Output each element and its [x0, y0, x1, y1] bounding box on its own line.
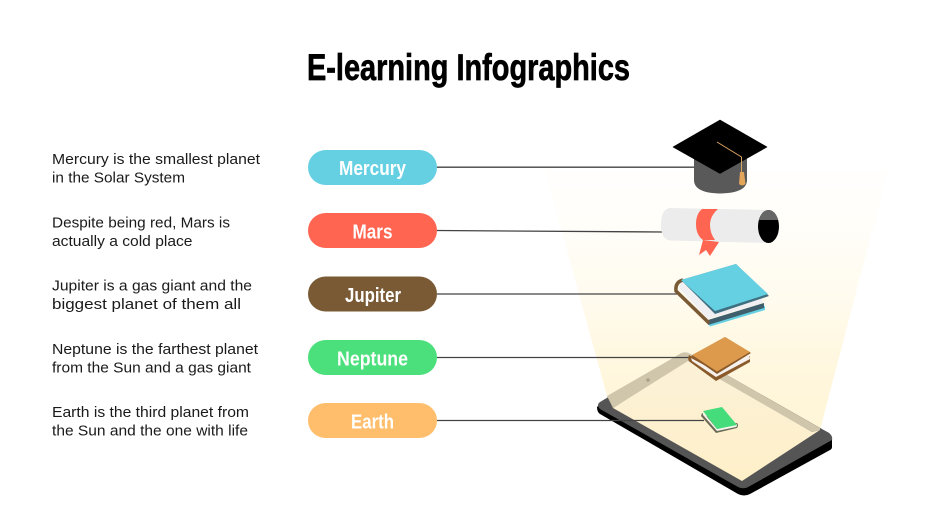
icon: orange book	[688, 337, 751, 381]
text block: Earth: the Sun and the one with life	[52, 422, 248, 440]
text block: Jupiter: biggest planet of them all	[52, 296, 241, 313]
screen	[613, 360, 820, 481]
icon: diploma scroll	[661, 208, 779, 256]
pill: Jupiter	[308, 276, 437, 312]
bezel under light	[607, 352, 820, 432]
text block: Mercury: in the Solar System	[52, 170, 185, 186]
connector lines	[437, 167, 704, 420]
text block: Earth: Earth is the third planet from	[52, 404, 249, 421]
pill: Earth: Earth	[351, 410, 394, 434]
text block: Mars	[52, 214, 230, 250]
camera	[646, 378, 650, 382]
text block: Neptune: from the Sun and a gas giant	[52, 360, 252, 376]
text block: Mercury	[52, 151, 261, 186]
icon: blue book	[676, 264, 769, 326]
text block: Mars: actually a cold place	[52, 233, 192, 250]
text block: Neptune: Neptune is the farthest planet	[52, 341, 259, 358]
pill: Neptune: Neptune	[337, 348, 408, 370]
light beam	[545, 170, 888, 481]
text block: Earth	[52, 404, 249, 440]
text block: Jupiter	[52, 278, 252, 313]
text block: Mercury: Mercury is the smallest planet	[52, 151, 261, 168]
text block: Mars: Despite being red, Mars is	[52, 214, 230, 231]
pill: Mercury: Mercury	[339, 157, 406, 180]
pill: Mars	[308, 213, 437, 248]
pill: Mars: Mars	[352, 220, 392, 244]
text block: Jupiter: Jupiter is a gas giant and the	[52, 278, 252, 294]
text block: Neptune	[52, 341, 259, 376]
title: E-learning Infographics	[307, 47, 630, 88]
pill: Neptune	[308, 340, 437, 375]
pill: Mercury	[308, 150, 437, 185]
icon: green book	[701, 407, 738, 433]
pill: Jupiter: Jupiter	[345, 284, 401, 307]
pill: Earth	[308, 403, 437, 438]
icon: graduation cap	[673, 120, 767, 194]
icon: tablet	[597, 352, 832, 496]
